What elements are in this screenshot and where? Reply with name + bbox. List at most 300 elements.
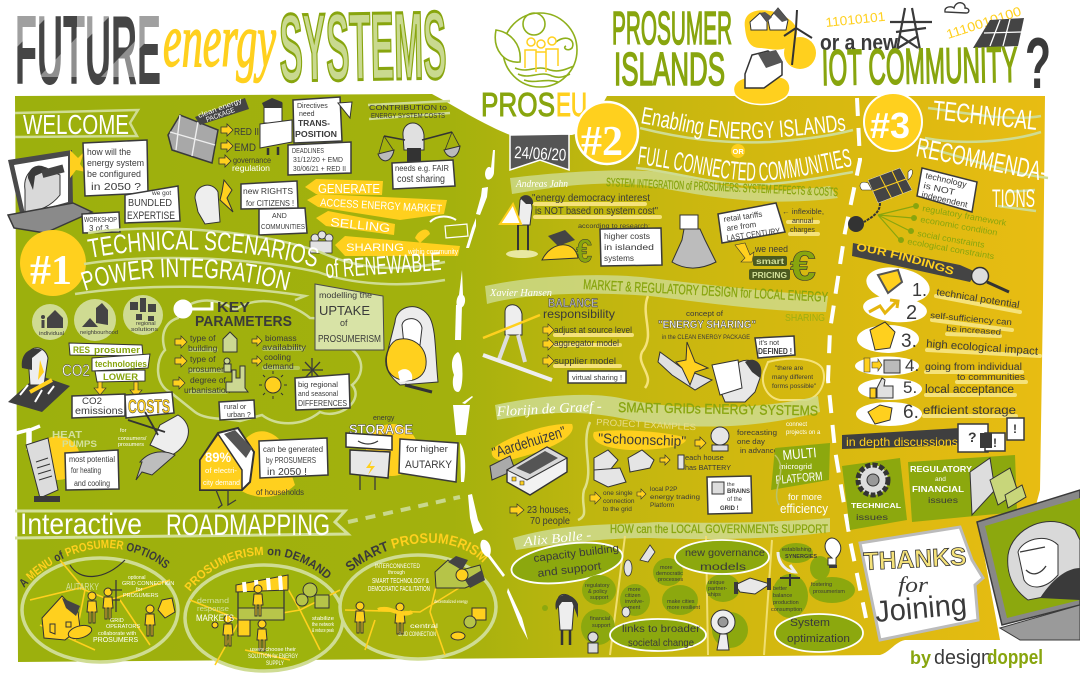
cup [453, 396, 473, 435]
connection and trading text: local P2P [650, 486, 677, 493]
ellipse: links to broader societal change: links to broader [622, 623, 701, 635]
label according to research: according to research: [578, 223, 650, 230]
box: most potential: for heating [71, 466, 101, 475]
labels in circles: consumption [771, 607, 802, 613]
section: welcome [8, 97, 468, 256]
finding 3: high ecological impact [926, 338, 1038, 358]
labels: GRID [110, 618, 124, 624]
icon: hand with star [658, 342, 712, 390]
island with solar and euro [542, 230, 592, 269]
blob behind house [240, 431, 295, 497]
labels: optional [128, 575, 146, 581]
circle: individual: individual [39, 331, 64, 337]
box: workshop 3 of 3: WORKSHOP [84, 215, 117, 224]
list of models [543, 324, 632, 367]
finding 2: self-sufficiency can [930, 310, 1013, 327]
balance responsibility: BALANCE [548, 296, 598, 310]
banner: in depth discussions: in depth discussions [846, 435, 958, 449]
box: fair cost sharing: cost sharing [397, 174, 445, 185]
battery each house: has BATTERY [685, 463, 731, 472]
icon: books and money [970, 458, 1026, 515]
balance responsibility [543, 296, 615, 321]
speaker ribbon: SYSTEM INTEGRATION of PROSUMERS: SYSTEM EFFECTS & COSTS [606, 175, 838, 199]
labels in circles: democratic [656, 571, 683, 577]
box: retail tariffs: are from [726, 220, 757, 233]
panel: multi microgrid platform: PLATFORM [775, 469, 823, 487]
labels: for [136, 587, 143, 593]
text of households: of households [256, 488, 304, 497]
character: scissors person: for [120, 428, 127, 434]
cloud: many different forms: "there are [775, 365, 804, 372]
labels: collaborate with [98, 631, 136, 637]
binary data arc right: 1110010100 [944, 3, 1023, 42]
labels in circles: regulatory [585, 583, 610, 589]
bread [452, 352, 462, 392]
panel: technical issues: issues [856, 513, 888, 522]
box: modelling the uptake of prosumerism: of [340, 318, 348, 328]
speaker ribbon: Alix Bolle - [522, 527, 592, 549]
constraint branches: social constraints [917, 228, 985, 250]
speech box: 2050 question: in 2050 ? [91, 181, 141, 193]
box: new rights for citizens [241, 181, 298, 209]
people [355, 602, 405, 634]
icon: laptop with observer [8, 150, 92, 233]
finding 3 [857, 322, 1040, 358]
labels: SMART TECHNOLOGY & [372, 578, 429, 585]
title curved: SMART PROSUMERISM [346, 533, 488, 571]
icon: prosumer house: 89% [205, 449, 232, 465]
labels: AUTARKY [66, 582, 99, 593]
market stall [236, 575, 288, 632]
wavy divider [641, 296, 648, 388]
box: thanks for joining: for [898, 572, 928, 597]
labels: PROSUMERS [123, 593, 159, 599]
findings list [855, 263, 1040, 426]
quote: is NOT based on system cost" [535, 206, 658, 217]
speech box: 2050 question: energy system [87, 158, 144, 169]
logo emblem [495, 13, 577, 87]
box: it's not defined: DEFINED ! [758, 347, 792, 356]
panel: multi microgrid platform: projects on a [786, 430, 821, 436]
list of models: aggregator model [554, 338, 619, 348]
labels: through [388, 570, 405, 576]
concept of energy sharing: concept of [686, 309, 724, 318]
box: modelling the uptake of prosumerism: UPTAKE [319, 303, 370, 318]
finding 4: 4. [905, 356, 919, 375]
labels: SOLUTION for ENERGY [248, 654, 298, 660]
text 23 houses 70 people: 70 people [530, 516, 570, 527]
labels in circles: more [660, 565, 673, 571]
labels [368, 563, 469, 638]
title: or a new IoT Community? [820, 3, 1051, 104]
we need smart pricing: we need [754, 244, 788, 254]
box: directives need transposition: POSITION [295, 130, 337, 139]
panel: regulatory and financial issues: REGULATORY [910, 465, 973, 474]
speaker ribbon: Andreas Jahn [515, 178, 568, 190]
arrow banner: generate: GENERATE [318, 181, 380, 196]
labels in circles: citizen [625, 593, 641, 599]
box: rural or urban: urban ? [227, 412, 251, 419]
box: deadlines: 31/12/20 + EMD [293, 157, 343, 164]
knife 2 [460, 443, 465, 482]
box: retail tariffs: LAST CENTURY [726, 226, 781, 243]
box: CO2 emissions: CO2 [82, 396, 102, 406]
label: lower [95, 370, 145, 382]
speaker ribbon: SMART GRIDs ENERGY SYSTEMS [618, 399, 818, 418]
box: costs: COSTS [128, 397, 170, 418]
panel: multi microgrid platform: connect [786, 422, 807, 428]
icon: gift package [168, 115, 218, 163]
credit: by designdoppel: doppel [987, 647, 1043, 669]
list of models: supplier model [554, 356, 616, 366]
ellipse: smart prosumerism [338, 533, 498, 661]
character: scissors person: prosumers [118, 442, 144, 448]
heading key parameters [195, 299, 292, 330]
box: modelling the uptake of prosumerism: modelling the [319, 290, 372, 300]
for more efficiency: efficiency [780, 501, 828, 516]
heading: Interactive [20, 508, 142, 541]
credit: by designdoppel: by [910, 648, 931, 668]
icon: Aardehuizen building [490, 447, 567, 495]
circle: regional solutions: regional [136, 321, 156, 327]
finding 1 [864, 263, 1020, 312]
speaker ribbon: Florijn de Graef - [495, 400, 602, 420]
ellipse: new governance models: new governance [685, 547, 765, 559]
labels in circles: financial [590, 616, 610, 622]
box: brains of the grid: of the [727, 497, 743, 503]
section: #2 heading [574, 100, 854, 186]
yellow house [42, 596, 80, 640]
tag: clean energy package: clean energy [197, 97, 243, 120]
ellipse: system optimization: optimization [787, 633, 850, 645]
constraint branches: regulatory framework [922, 203, 1008, 228]
box: retail tariffs: retail tariffs [723, 210, 763, 224]
box: retail tariffs [718, 203, 785, 243]
panel: regulatory and financial issues: FINANCIAL [912, 485, 964, 494]
box: and communities [259, 208, 307, 235]
panel: regulatory and financial issues: issues [928, 496, 958, 505]
connection and trading text: energy trading [650, 494, 700, 501]
arrow banner: sharing within community: SHARING [346, 242, 404, 254]
box: regional and seasonal differences: DIFFERENCES [298, 398, 347, 408]
character with lightning [195, 180, 233, 224]
box: directives need transposition [293, 97, 352, 143]
text or a new: or a new [820, 30, 899, 55]
box: bundled expertise: we got [151, 190, 171, 197]
ellipse: links to broader societal change [610, 619, 706, 651]
text CO2: CO2 [62, 361, 90, 380]
speaker ribbon: Xavier Hansen [489, 287, 552, 299]
speech bubbles [958, 418, 1024, 452]
panel: multi microgrid platform: MULTI [782, 444, 817, 463]
labels: the network [312, 622, 334, 628]
labels in circles: more resilient [667, 605, 700, 611]
list of parameters right: cooling [264, 352, 291, 362]
badge #1 [20, 230, 86, 296]
banner: our findings [852, 243, 1010, 294]
list of parameters left: type of [190, 333, 216, 343]
text forecasting: one day [737, 437, 765, 446]
box: deadlines: DEADLINES [292, 146, 324, 155]
box: for higher autarky: for higher [406, 444, 448, 454]
label project examples: PROJECT EXAMPLES [596, 417, 696, 432]
title curved: PROSUMERISM on DEMAND [184, 546, 331, 592]
text inflexible charges: ← inflexible, [782, 209, 824, 216]
people and car [67, 580, 175, 641]
arrow banner: selling: SELLING [330, 215, 391, 235]
speech box: 2050 question [83, 140, 148, 196]
box: can be generated: by PROSUMERS [266, 455, 316, 465]
we need smart pricing [749, 244, 790, 280]
houses cluster [594, 450, 654, 487]
icon: hand with solar panel [415, 216, 468, 243]
heading technical scenarios: TECHNICAL SCENARIOS [87, 230, 318, 266]
arrows down [94, 382, 142, 397]
heading enabling energy islands: Enabling ENERGY ISLANDs [641, 107, 846, 140]
tag: clean energy package [195, 97, 249, 125]
panel: multi microgrid platform [771, 422, 830, 490]
text heat pumps [52, 430, 97, 450]
speaker ribbon: HOW can the LOCAL GOVERNMENTs SUPPORT [610, 522, 829, 536]
labels: & reduce peak [312, 628, 334, 634]
box: regional and seasonal differences: big regional [298, 380, 338, 389]
mini islands houses [70, 560, 125, 576]
badge #2 [576, 102, 638, 165]
connection and trading text [590, 486, 700, 513]
text forecasting: in advance [740, 446, 778, 455]
ellipse: system optimization [775, 614, 863, 652]
cloud: many different forms: many different [772, 374, 813, 381]
question mark: ? [1025, 24, 1051, 104]
icon: prosumer house [200, 428, 254, 508]
cloud outline [158, 301, 361, 423]
box: deadlines [288, 142, 351, 175]
speaker ribbon [510, 170, 838, 202]
text storage heading: STORAGE [349, 421, 413, 437]
character with microphone [542, 594, 578, 645]
heading key parameters: KEY [217, 299, 250, 316]
ribbon: WELCOME: WELCOME [23, 109, 129, 140]
section: Florijn de Graaf talk [490, 395, 830, 527]
box: thanks for joining: THANKS [863, 543, 967, 576]
icon: leaf-bug and dove [622, 545, 655, 617]
section: Xavier Hansen talk [483, 275, 829, 402]
list of parameters left: degree of [190, 375, 227, 385]
labels in circles: better [773, 586, 787, 592]
speech bubbles: ! [993, 436, 997, 450]
finding 5 [858, 378, 1015, 400]
panel: technical issues [842, 458, 907, 530]
heading: ROADMAPPING [166, 509, 330, 542]
knife [466, 218, 476, 248]
trees and house [296, 583, 329, 608]
labels: decentralized energy [434, 599, 469, 604]
cloud: many different forms: forms possible" [772, 383, 817, 390]
box: workshop 3 of 3: 3 of 3 [89, 224, 110, 233]
date flag: 24/06/20: 24/06/20 [514, 143, 567, 165]
labels in circles: support [590, 595, 609, 601]
icon: prosumer house: of electri- [205, 468, 238, 475]
heading full connected communities: FULL CONNECTED COMMUNITIES [638, 146, 852, 181]
icons: house and person and buildings [223, 332, 248, 392]
ellipse: new governance models [675, 540, 769, 574]
tag: Schoonschip: "Schoonschip" [598, 430, 686, 449]
small badge OR: OR [732, 147, 744, 156]
speaker ribbon [495, 395, 820, 427]
dashed divider to section 3 [828, 98, 866, 618]
box: for higher autarky [399, 439, 458, 482]
label: technologies [92, 354, 150, 371]
spoon 2 [480, 540, 505, 577]
spoon [456, 270, 465, 308]
icon: islands with houses and wind turbine [733, 8, 816, 104]
box: virtual sharing [568, 371, 626, 383]
ellipse: capacity building [509, 536, 625, 590]
fork 2 [455, 305, 462, 340]
list of parameters left: type of [190, 354, 216, 364]
panel: regulatory and financial issues: and [935, 476, 946, 483]
box: deadlines: 30/06/21 + RED II [293, 166, 346, 173]
character on mat [8, 348, 70, 412]
labels: response [197, 606, 229, 613]
connection and trading text: connection [603, 498, 635, 505]
box: directives need transposition: need [299, 111, 315, 118]
labels in circles: prosumerism [813, 589, 845, 595]
section: #3 technical recommendations [842, 94, 1080, 642]
ellipse: capacity building: and support [537, 560, 602, 580]
constraint branches: economic condition [920, 214, 998, 238]
arrow yellow [735, 243, 754, 262]
character: warning triangle [500, 195, 538, 258]
labels: GRID CONNECTION [122, 581, 174, 587]
labels in circles: processes [658, 577, 683, 583]
box: costs [125, 392, 174, 418]
labels in circles: ment [628, 605, 641, 611]
ellipse: prosumerism on demand [183, 546, 344, 673]
banner: in depth discussions [842, 428, 963, 449]
labels in circles: support [592, 623, 611, 629]
concept of energy sharing: "ENERGY SHARING" [658, 319, 756, 331]
ribbon: contribution to energy system costs [368, 101, 450, 120]
text forecasting: forecasting [737, 428, 777, 437]
icon: synergies arrows [778, 552, 795, 572]
badge #2: #2 [581, 119, 623, 165]
ellipse: a menu of prosumer options [20, 540, 180, 664]
ribbon: contribution to energy system costs: CONTRIBUTION to [369, 103, 447, 112]
labels in circles: more [628, 587, 641, 593]
speaker ribbon: MARKET & REGULATORY DESIGN for LOCAL ENERGY [583, 276, 829, 305]
blob behind heat pump [36, 436, 80, 480]
label: RES prosumer: prosumer [94, 345, 140, 356]
label: RES prosumer [69, 343, 143, 356]
icon: group of people [310, 231, 333, 253]
text inflexible charges [782, 209, 824, 234]
finding 1: 1. [912, 280, 927, 300]
circle: neighbourhood: neighbourhood [80, 330, 118, 336]
labels: stabilize [312, 616, 334, 622]
ribbon lines [918, 108, 1048, 211]
box: technology is not independent: is NOT [923, 180, 956, 197]
list of parameters right [252, 333, 307, 371]
section: 89 percent house and storage [200, 415, 458, 508]
labels in circles: balance [773, 593, 792, 599]
icon: cloud [945, 3, 969, 13]
box: most potential [65, 450, 119, 490]
list: RED II, EMD, governance regulation: governance [233, 156, 271, 165]
box: higher costs [600, 228, 662, 266]
small badge OR [731, 144, 745, 158]
text storage heading: energy [373, 415, 395, 422]
finding 6: 6. [903, 402, 919, 423]
labels: GRID CONNECTION [398, 631, 436, 638]
heading power integration: POWER INTEGRATION [80, 258, 290, 290]
character reading [712, 360, 761, 402]
battery each house [660, 453, 731, 472]
list: RED II, EMD, governance regulation [219, 124, 271, 173]
heading tions: TIONS [992, 185, 1035, 213]
heading key parameters: PARAMETERS [195, 313, 292, 330]
icon: scales small [780, 574, 800, 586]
house with solar [378, 556, 486, 640]
box: can be generated: can be generated [263, 444, 323, 454]
ribbon [15, 511, 348, 538]
euro character: € [790, 242, 816, 289]
ellipse: new governance models: models [700, 561, 746, 573]
labels: users choose their [250, 647, 296, 653]
cutlery divider column [452, 150, 528, 640]
box: higher costs: systems [604, 253, 634, 263]
speaker ribbon [485, 275, 829, 312]
finding 6: efficient storage [923, 403, 1016, 417]
list of parameters right: demand [263, 361, 294, 371]
knife 3 [507, 588, 528, 640]
labels: OPERATORS [106, 624, 140, 630]
box: CO2 emissions [72, 394, 125, 418]
box: and communities: AND [272, 213, 287, 220]
heading of renewable: of RENEWABLE [324, 246, 442, 284]
labels: MARKETS [196, 613, 234, 623]
small green circles [581, 543, 855, 648]
box: rural or urban: rural or [224, 404, 247, 411]
icon: laptop with speaker [977, 490, 1080, 640]
box: workshop 3 of 3 [82, 212, 120, 233]
fork 3 [468, 494, 483, 534]
text storage heading [349, 415, 413, 437]
finding 2 [862, 293, 1013, 337]
date flag: 24/06/20 [510, 134, 569, 170]
text inflexible charges: charges [790, 227, 815, 234]
section: scale circles [32, 295, 163, 341]
people at market [212, 615, 267, 651]
box: modelling the uptake of prosumerism [315, 284, 384, 350]
balance responsibility: responsibility [543, 307, 615, 321]
arrow banner: access energy market: ACCESS ENERGY MARKET [320, 197, 443, 215]
arrow banner: generate [305, 179, 383, 196]
box: most potential: and cooling [74, 479, 110, 488]
logo: PROSEU [481, 13, 587, 123]
title curved: A MENU of PROSUMER OPTIONS [20, 540, 170, 588]
dashed connector [348, 497, 460, 522]
badge #1: #1 [30, 248, 72, 294]
box: technology is not independent [917, 168, 977, 212]
box: new rights for citizens: new RIGHTS [243, 186, 293, 196]
labels: central [410, 623, 439, 630]
speech bubbles: ! [1013, 422, 1017, 436]
box: regional and seasonal differences [295, 374, 350, 410]
label: lower: LOWER [103, 372, 139, 382]
speech bubbles: ? [968, 429, 977, 445]
heading ribbon lines [75, 229, 445, 300]
